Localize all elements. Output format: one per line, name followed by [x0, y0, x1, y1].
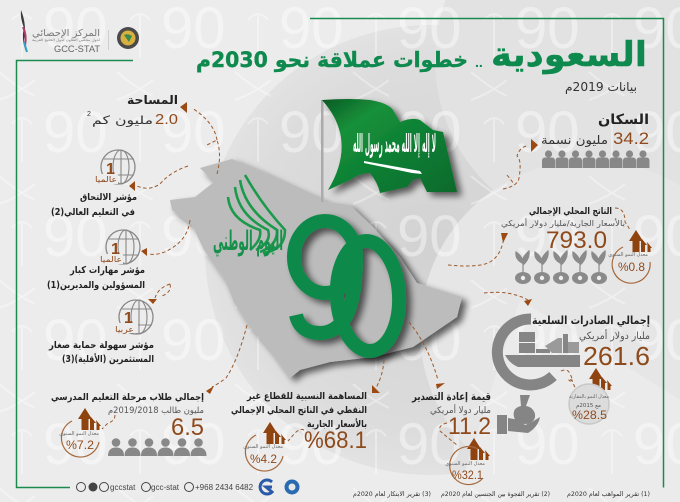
footer contacts: gcc-stat	[151, 483, 180, 492]
re-export block	[411, 391, 540, 485]
footnotes	[353, 490, 650, 498]
exports block: إجمالي الصادرات السلعية	[532, 314, 650, 327]
indicator: minority investors: المستثمرين (الأقلية)(3)	[62, 353, 154, 365]
indicator: minority investors: 1	[124, 310, 133, 327]
footnotes: (2) تقرير الفجوة بين الجنسين لعام 2020م	[441, 490, 550, 498]
indicator: executive skills: مؤشر مهارات كبار	[69, 265, 145, 276]
arrow: non-oil share	[372, 360, 384, 393]
title: خطوات عملاقة نحو 2030م	[196, 48, 468, 72]
logo: GCC-STAT: المركز الإحصائي	[32, 28, 100, 39]
map of Saudi Arabia	[170, 159, 462, 378]
students block	[51, 392, 206, 457]
population block: مليون نسمة	[541, 133, 608, 148]
area block: 2.0	[155, 111, 178, 128]
exports block	[497, 314, 650, 424]
indicator: minority investors	[48, 300, 154, 365]
arrow: area	[180, 102, 220, 174]
non-oil sector share block: %4.2	[250, 452, 277, 466]
GDP block: الناتج المحلي الإجمالي	[529, 206, 612, 217]
indicator: tertiary enrollment: في التعليم العالي(2)	[51, 207, 135, 218]
logo: GCC-STAT: لدول مجلس التعاون لدول الخليج العربية	[32, 38, 100, 42]
GDP block: 793.0	[546, 227, 607, 254]
population block	[541, 112, 650, 168]
GDP block: بالأسعار الجارية/مليار دولار أمريكي	[501, 218, 625, 228]
non-oil sector share block: المساهمة النسبية للقطاع غير	[246, 391, 367, 402]
indicator: tertiary enrollment: عالميا	[95, 175, 117, 184]
emblem: number 90	[294, 221, 402, 353]
arrow: population	[503, 139, 538, 189]
exports block: مع 2015م	[576, 403, 601, 409]
title	[196, 35, 647, 75]
non-oil sector share block: %68.1	[304, 427, 367, 454]
GDP block	[501, 206, 652, 284]
arrow: minority investors	[148, 284, 170, 304]
GDP block: %0.8	[618, 260, 645, 274]
non-oil sector share block: بالأسعار الجارية	[307, 418, 367, 430]
National Day calligraphy	[213, 175, 285, 257]
logo: GCC-STAT	[21, 10, 139, 55]
students block: 6.5	[171, 414, 204, 441]
indicator: executive skills	[47, 230, 145, 291]
students block: معدل النمو السنوي	[59, 431, 99, 437]
population block: السكان	[598, 112, 649, 128]
indicator: minority investors: عربيا	[115, 325, 134, 334]
exports block: معدل النمو بالمقارنة	[569, 394, 609, 400]
indicator: executive skills: عالميا	[100, 255, 122, 264]
re-export block: معدل النمو السنوي	[445, 461, 485, 467]
indicator: tertiary enrollment	[51, 150, 137, 218]
icon: cargo ship	[497, 319, 580, 385]
non-oil sector share block	[231, 391, 367, 471]
indicator: tertiary enrollment: مؤشر الالتحاق	[80, 192, 137, 203]
indicator: tertiary enrollment: 1	[106, 161, 115, 178]
indicator: executive skills: 1	[111, 241, 120, 258]
re-export block: قيمة إعادة التصدير	[411, 391, 491, 403]
footer contacts: gccstat	[110, 483, 136, 492]
footnotes: (1) تقرير المواهب لعام 2020م	[567, 490, 650, 498]
icon: hand holding money bag	[497, 395, 540, 434]
students block: مليون طالب 2019/2018م	[108, 406, 204, 416]
arrow: tertiary enrollment	[129, 166, 188, 191]
non-oil sector share block: النفطي في الناتج المحلي الإجمالي	[231, 405, 367, 416]
area block: مليون كم	[92, 113, 153, 128]
non-oil sector share block: معدل النمو السنوي	[243, 444, 283, 450]
population block: 34.2	[613, 129, 649, 148]
area block: المساحة	[127, 93, 178, 107]
arrow: re-export	[409, 322, 445, 389]
arrow: GDP	[448, 233, 508, 266]
area block	[87, 93, 178, 128]
subtitle: data year: بيانات 2019م	[565, 80, 637, 94]
students block: %7.2	[66, 438, 94, 452]
title: ..	[475, 54, 483, 70]
arrow: exports	[484, 292, 532, 306]
infographic canvas: اليوم الوطني	[213, 226, 283, 257]
arrow: executive skills	[141, 220, 190, 256]
students block: إجمالي طلاب مرحلة التعليم المدرسي	[51, 392, 204, 403]
re-export block: 11.2	[448, 413, 491, 440]
logo: GCC-STAT: GCC-STAT	[54, 44, 100, 55]
title: السعودية	[491, 35, 647, 75]
footer contacts	[76, 480, 300, 494]
arrow: students	[206, 325, 247, 394]
re-export block: مليار دولا أمريكي	[430, 404, 491, 416]
exports block: مليار دولار أمريكي	[579, 329, 650, 342]
GDP block: معدل النمو السنوي	[608, 252, 648, 258]
exports block: %28.5	[572, 408, 607, 422]
footnotes: (3) تقرير الابتكار لعام 2020م	[353, 490, 431, 498]
footer contacts: +968 2434 6482	[195, 483, 254, 492]
exports block: 261.6	[583, 341, 650, 371]
indicator: executive skills: المسؤولين والمديرين(1)	[47, 280, 145, 291]
re-export block: %32.1	[452, 468, 483, 482]
area block: 2	[87, 111, 91, 118]
flag	[321, 99, 457, 202]
indicator: minority investors: مؤشر سهولة حماية صغار	[48, 340, 154, 351]
